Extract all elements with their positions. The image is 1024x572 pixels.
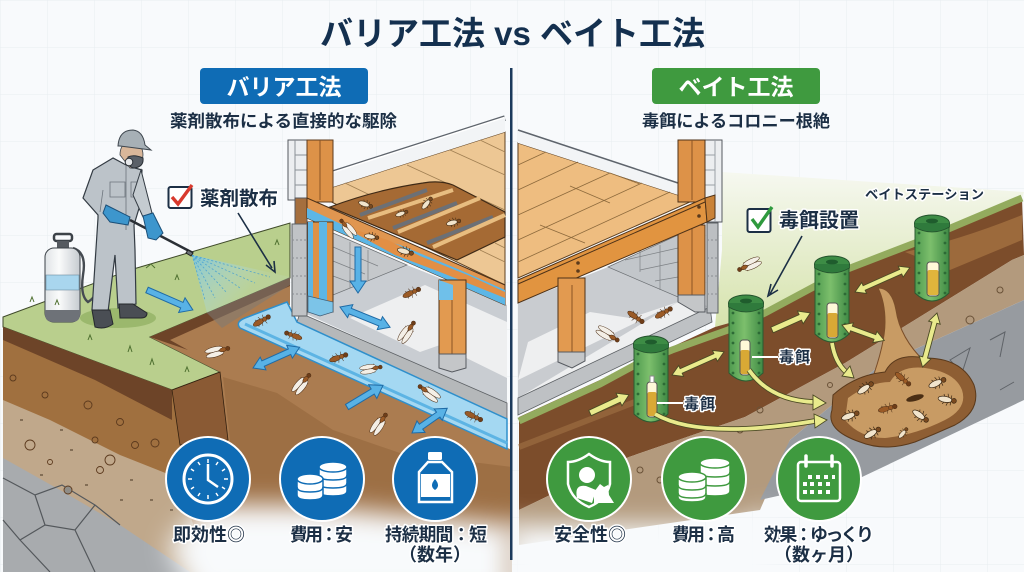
- treated water band: [238, 302, 507, 449]
- label: duration short: 持続期間：短: [385, 524, 487, 545]
- label: poison bait, lower: 毒餌: [684, 395, 715, 413]
- panel: bait method illustration: [518, 130, 1024, 545]
- front beam: [518, 195, 715, 303]
- bottom fades: [168, 505, 770, 572]
- pebbles: [10, 375, 159, 494]
- label: cost high: 費用：高: [672, 525, 735, 545]
- floor under deck: [518, 267, 710, 398]
- label: bait station: ベイトステーション: [865, 187, 984, 202]
- concrete footing: [518, 307, 712, 415]
- worker in protective suit: [80, 130, 193, 328]
- sprayer tank: [45, 220, 112, 322]
- subtitle: barrier: 薬剤散布による直接的な駆除: [170, 112, 397, 131]
- icon: shield with child and pet: [547, 437, 631, 521]
- wall siding: [705, 140, 722, 313]
- label: poison bait, upper: [752, 348, 810, 366]
- centre divider: [510, 68, 512, 560]
- grass tufts: [30, 240, 279, 372]
- label: effect slow: （数ヶ月）: [774, 545, 864, 565]
- termites, bait side: [595, 255, 763, 345]
- soil layers: [519, 198, 1024, 510]
- icon: coins, high cost: [662, 437, 746, 521]
- icon: calendar: [777, 437, 861, 521]
- block wall: [608, 235, 678, 297]
- bait station 1: [634, 336, 668, 422]
- post with blue treatment: [308, 222, 333, 316]
- callout arrow: [768, 236, 802, 296]
- heading badge: bait: ベイト工法: [678, 74, 794, 100]
- heading badge: bait: [652, 68, 820, 104]
- bait station 2: [728, 295, 764, 381]
- label: effect slow: 効果：ゆっくり: [764, 525, 874, 545]
- icon: clock: [166, 437, 250, 521]
- grey block wall: [333, 233, 407, 295]
- front deck post: [439, 280, 466, 372]
- label: effect slow: [764, 525, 874, 565]
- heading badge: barrier: バリア工法: [226, 74, 342, 100]
- back post: [678, 140, 705, 312]
- background grass field: [3, 223, 290, 390]
- subtitle: bait: 毒餌によるコロニー根絶: [642, 112, 830, 131]
- blue flow arrows: [144, 247, 451, 439]
- callout arrow: [238, 213, 275, 272]
- house wall siding and concrete column: [288, 140, 307, 316]
- label: poison bait, upper: 毒餌: [779, 348, 810, 366]
- label: safety: 安全性◎: [554, 525, 626, 545]
- treated strip at trench edge: [207, 277, 290, 328]
- wooden deck boards: [323, 132, 505, 285]
- grass strip edge: [519, 198, 1022, 421]
- exposed joists: [330, 182, 505, 260]
- floor under deck: [302, 265, 507, 405]
- label: duration short: （数年）: [399, 544, 471, 565]
- label: cost low: 費用：安: [290, 525, 353, 545]
- callout: poison bait placement: 毒餌設置: [779, 209, 859, 232]
- icon: coins, low cost: [280, 437, 364, 521]
- label: duration short: [385, 524, 487, 565]
- concrete footing: [297, 313, 507, 419]
- soil trench ground: [150, 278, 512, 572]
- spray fan: [192, 255, 290, 313]
- label: poison bait, lower: [657, 395, 715, 413]
- callout: chemical spraying: 薬剤散布: [200, 188, 278, 210]
- yellow colony arrows: [587, 262, 943, 429]
- termites, barrier side: [204, 194, 485, 437]
- left ground cross-section layers: [3, 327, 230, 572]
- panel: barrier method illustration: [3, 118, 512, 572]
- bait station 4: [914, 215, 950, 301]
- bait station 3: [814, 256, 850, 342]
- heading badge: barrier: [200, 68, 368, 104]
- front post: [558, 278, 585, 368]
- label: immediate effect: 即効性◎: [173, 525, 245, 545]
- tunnel: [870, 288, 925, 385]
- deck boards: [518, 143, 690, 278]
- callout: chemical spraying: [168, 185, 278, 210]
- icon: chemical bottle: [393, 437, 477, 521]
- back grass slope: [715, 172, 1024, 327]
- back post: [307, 140, 333, 202]
- termite colony nest: [831, 357, 976, 447]
- title: バリア工法 vs ベイト工法: [320, 15, 705, 52]
- callout: poison bait placement: [748, 207, 859, 232]
- front beam with blue treatment: [307, 198, 505, 305]
